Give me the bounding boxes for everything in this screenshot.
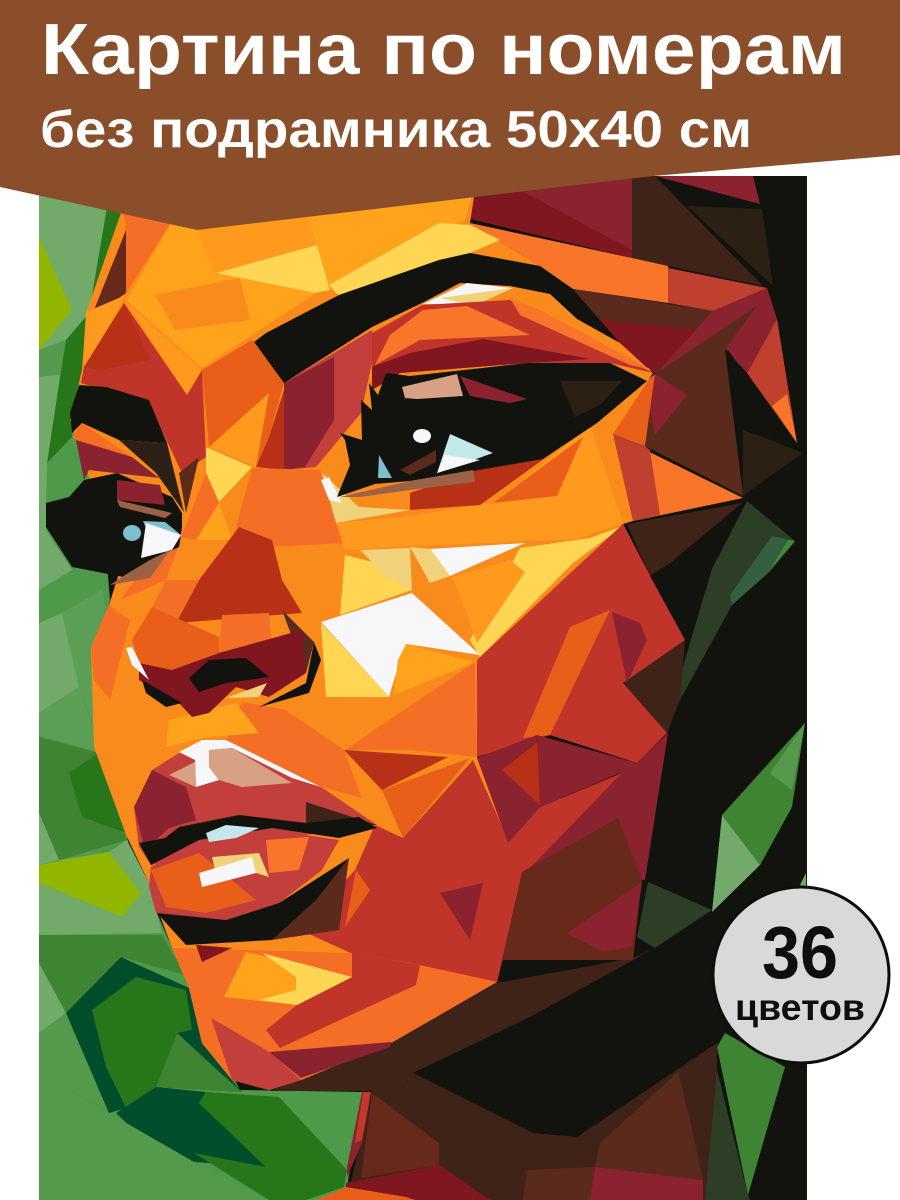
painting background: black [39, 176, 807, 1200]
badge label: цветов [735, 987, 865, 1028]
philtrum and mid-face [226, 702, 362, 798]
right eyelid [372, 298, 653, 390]
right eye [337, 363, 647, 497]
face base [70, 190, 685, 1090]
badge number: 36 [762, 911, 838, 994]
nose [126, 607, 321, 717]
left eye [46, 423, 199, 585]
eyebrow highlight [423, 283, 513, 304]
right eyebrow [254, 253, 620, 383]
title: Картина по номерам [41, 10, 846, 90]
cheek under the right eye [336, 426, 623, 550]
painting: polygonal portrait of a woman [39, 176, 807, 1200]
lips [134, 740, 377, 945]
left eyebrow [70, 385, 167, 443]
badge: 36 colours [713, 887, 889, 1063]
green foliage on the left [39, 176, 362, 1200]
cheek triangles [477, 524, 685, 763]
subtitle: без подрамника 50х40 см [40, 101, 752, 159]
brown title banner [0, 0, 900, 230]
dark hair, neck and shoulder on the right [270, 176, 806, 1200]
chin [172, 948, 497, 1090]
